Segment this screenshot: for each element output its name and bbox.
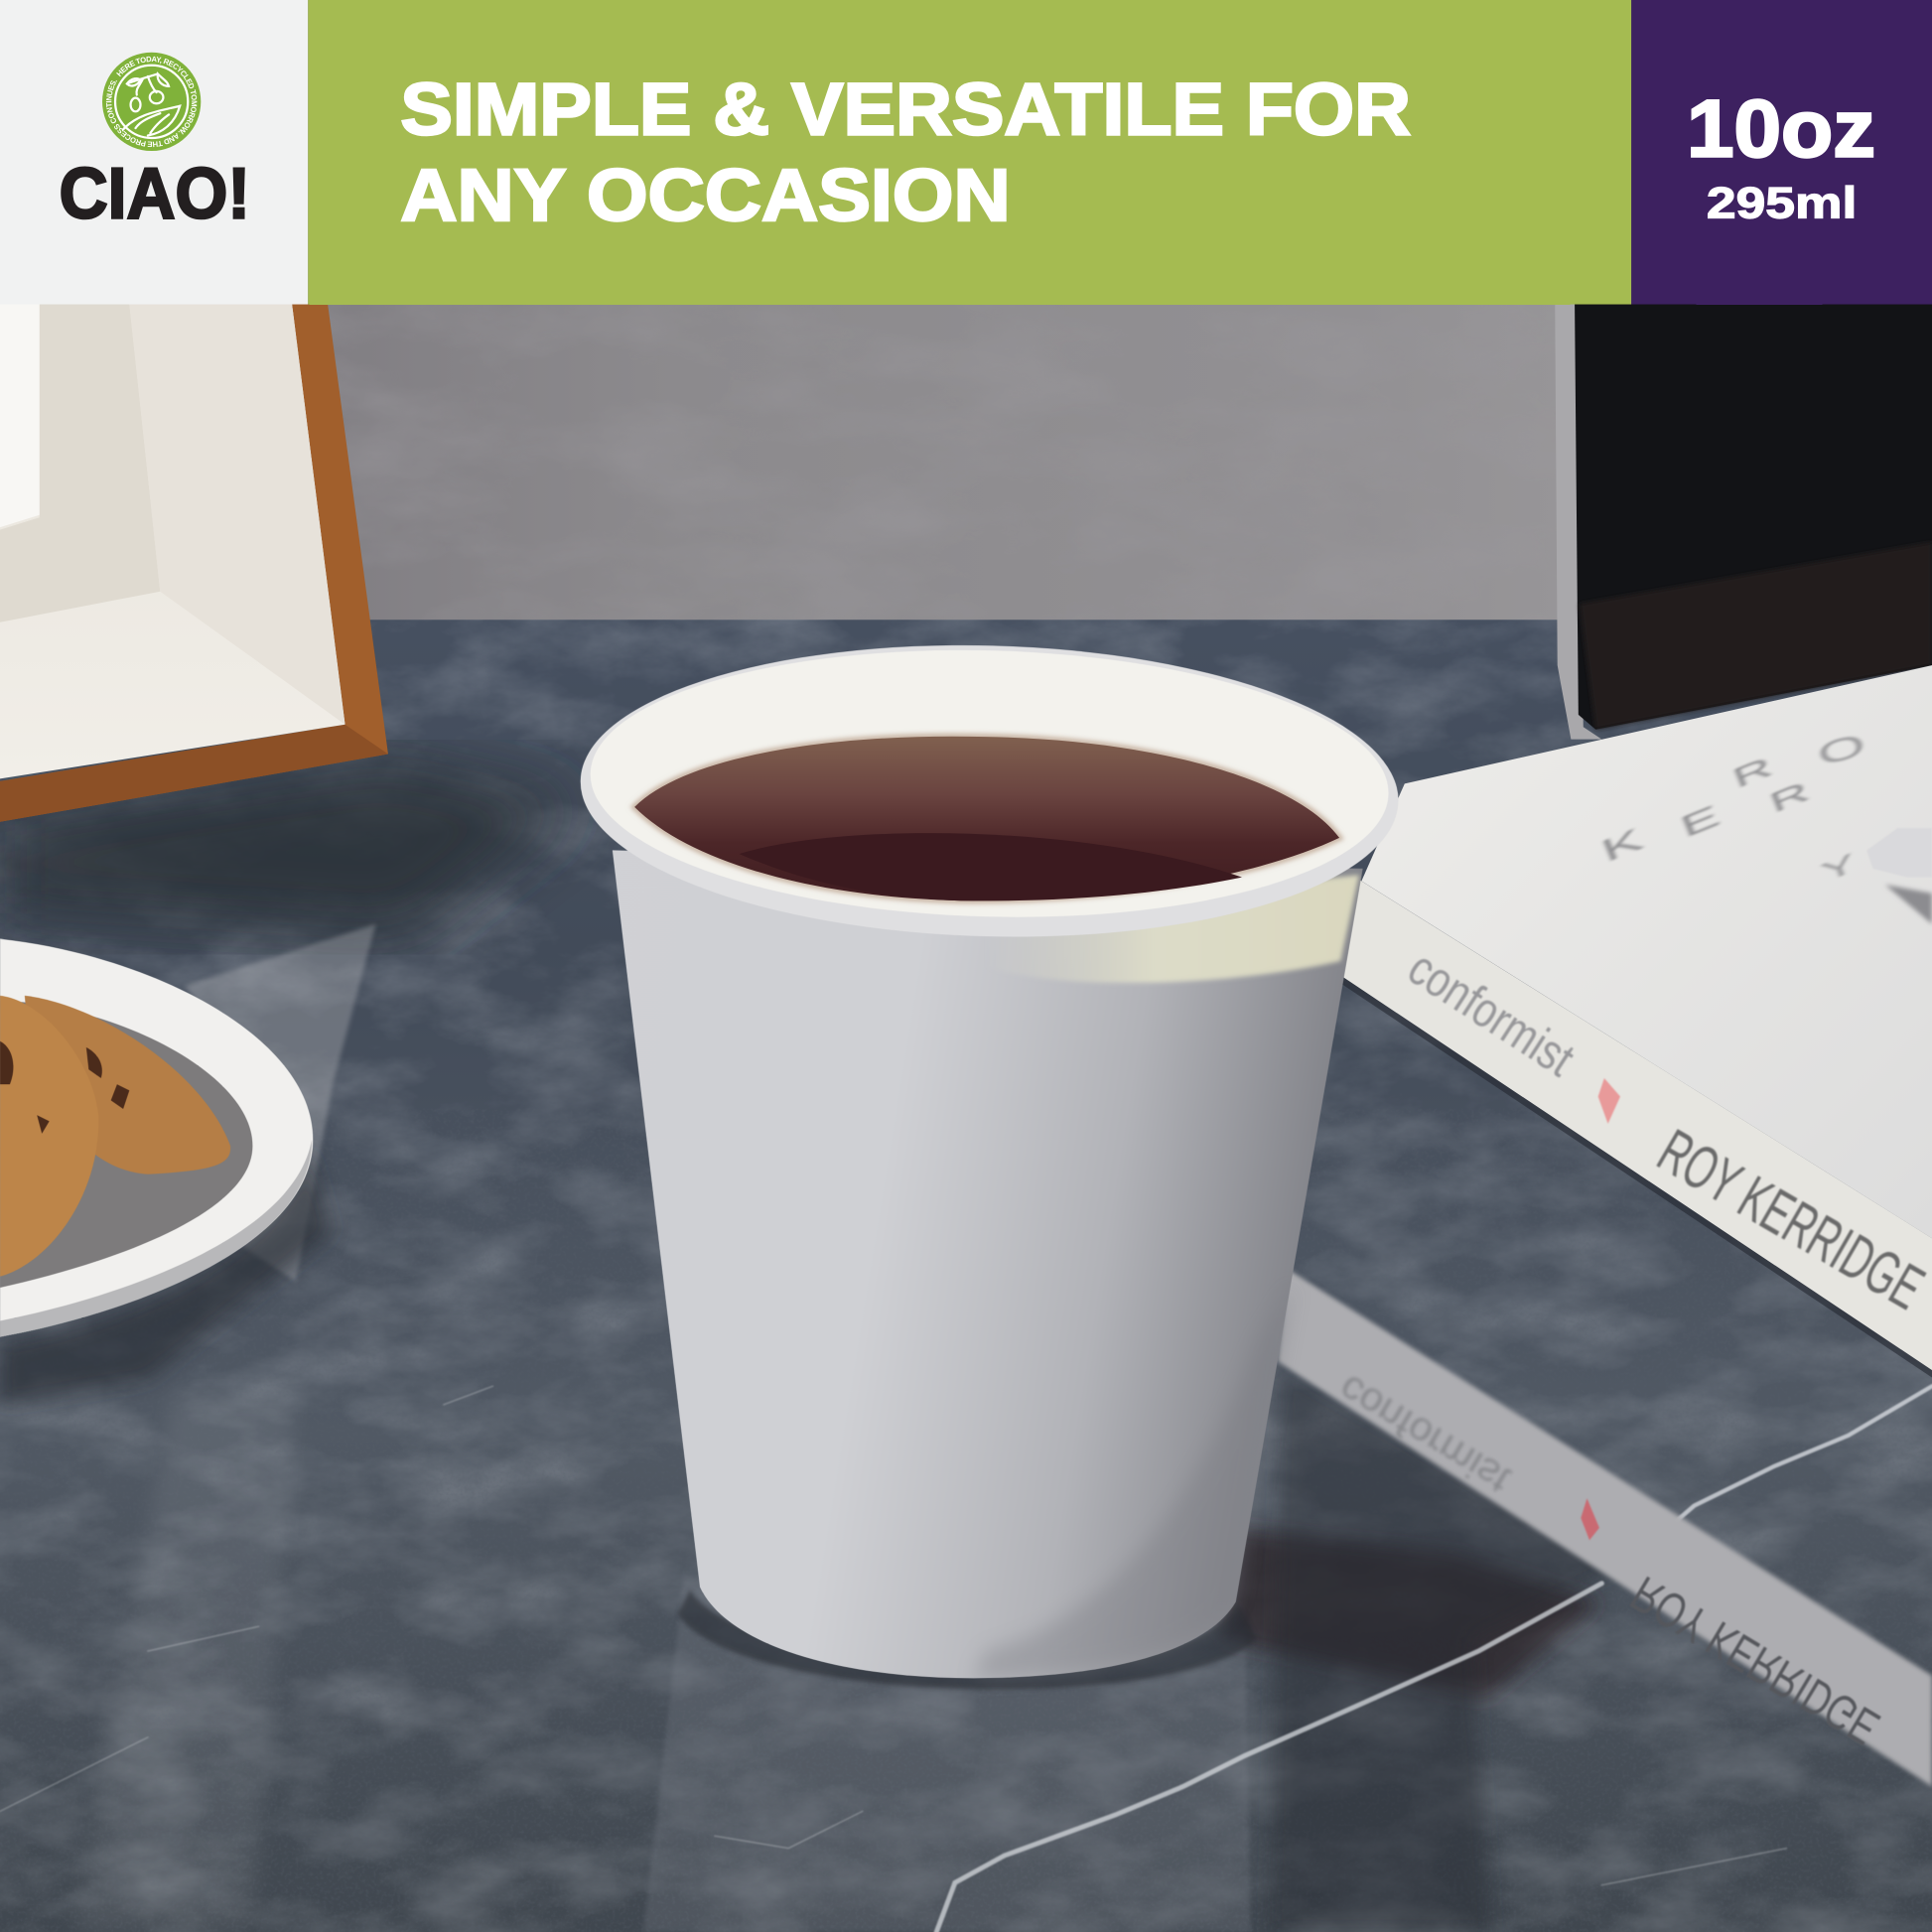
coffee edge tint xyxy=(634,737,1339,900)
badge disc xyxy=(102,53,201,151)
size background xyxy=(1631,0,1932,305)
pen shadow xyxy=(1885,885,1932,924)
coffee xyxy=(634,737,1339,900)
logo panel background xyxy=(0,0,308,305)
main vein xyxy=(936,1584,1601,1932)
reflected spine xyxy=(1278,1269,1932,1787)
book spine xyxy=(1343,878,1932,1370)
brand name: CIAO! xyxy=(60,155,250,234)
cup contact shadow xyxy=(678,1589,1257,1690)
front cookie xyxy=(0,996,98,1277)
heading text xyxy=(400,68,1411,236)
heading background xyxy=(308,0,1631,305)
frame wood xyxy=(0,305,388,822)
heading line 1: SIMPLE & VERSATILE FOR xyxy=(400,68,1411,150)
mat side xyxy=(129,305,345,725)
reflected red mark xyxy=(1581,1498,1599,1540)
book xyxy=(1340,665,1932,1378)
leaves xyxy=(127,73,169,86)
plate lower lip shade xyxy=(0,1140,312,1337)
pen clip xyxy=(1866,828,1932,878)
plate well xyxy=(0,1001,252,1288)
cup warm band xyxy=(986,875,1359,983)
cup right shade xyxy=(973,1282,1294,1678)
marble speckle xyxy=(0,1109,1932,1932)
reflected title: conformist xyxy=(1331,1366,1517,1502)
small veins xyxy=(0,1386,1787,1885)
monitor xyxy=(1555,305,1932,740)
cookie chips xyxy=(0,1041,129,1134)
paper cup xyxy=(577,635,1402,1690)
cover title letter R upper: R xyxy=(1728,751,1776,794)
olives xyxy=(131,98,140,111)
spine red mark xyxy=(1598,1078,1620,1124)
olive branch icon xyxy=(123,73,180,136)
mat shadow panel xyxy=(0,305,160,622)
logo panel xyxy=(0,0,347,305)
cup inner rim xyxy=(587,640,1392,927)
size ounces: 10oz xyxy=(1687,84,1875,175)
cup body xyxy=(613,850,1363,1678)
book cover xyxy=(1361,665,1932,1238)
size millilitres: 295ml xyxy=(1707,180,1857,228)
cup shadow xyxy=(1220,1528,1601,1701)
marble veins xyxy=(0,1386,1932,1932)
cover title letter Y: Y xyxy=(1818,848,1861,888)
spine text: conformist: conformist xyxy=(1399,939,1585,1087)
cover title letter E: E xyxy=(1676,799,1725,844)
monitor edge xyxy=(1555,305,1601,740)
dark reflection xyxy=(1269,1368,1626,1932)
cup rim xyxy=(577,635,1402,947)
book reflection xyxy=(1278,1269,1932,1787)
reflection of frame xyxy=(185,924,376,1282)
heading line 2: ANY OCCASION xyxy=(400,154,1011,236)
branch xyxy=(127,73,158,95)
cover title letter K: K xyxy=(1596,821,1648,869)
back cookie xyxy=(25,996,230,1174)
marble table xyxy=(0,620,1932,1932)
marble texture xyxy=(0,620,1932,1932)
plate shadow xyxy=(0,1146,333,1405)
plate rim xyxy=(0,939,313,1337)
left streak xyxy=(73,1392,296,1932)
plate with cookies xyxy=(0,939,333,1405)
monitor screen xyxy=(1575,305,1932,730)
mat window xyxy=(0,305,40,527)
header band xyxy=(0,0,1932,305)
badge circular text: HERE TODAY, RECYCLED TOMORROW. AND THE PROCESS CONTINUES. xyxy=(105,56,197,147)
coffee reflection xyxy=(740,833,1242,900)
field hills xyxy=(123,106,180,136)
frame lower edge xyxy=(0,725,388,822)
cover title letter O: O xyxy=(1814,727,1869,773)
upper vein xyxy=(1632,1386,1932,1559)
monitor reflection xyxy=(1580,542,1932,730)
frame mat xyxy=(0,305,345,778)
dark area under picture frame xyxy=(0,758,579,936)
spine shadow edge xyxy=(1340,977,1932,1378)
cover title letter R lower: R xyxy=(1765,775,1814,819)
wall xyxy=(0,305,1932,637)
table reflections xyxy=(73,924,1626,1932)
heading panel xyxy=(308,0,1631,305)
center streak xyxy=(643,1578,1251,1932)
badge ring xyxy=(115,66,188,138)
wall texture xyxy=(321,305,1565,622)
picture frame xyxy=(0,305,388,822)
logo badge xyxy=(102,52,201,151)
size panel xyxy=(1631,0,1932,305)
